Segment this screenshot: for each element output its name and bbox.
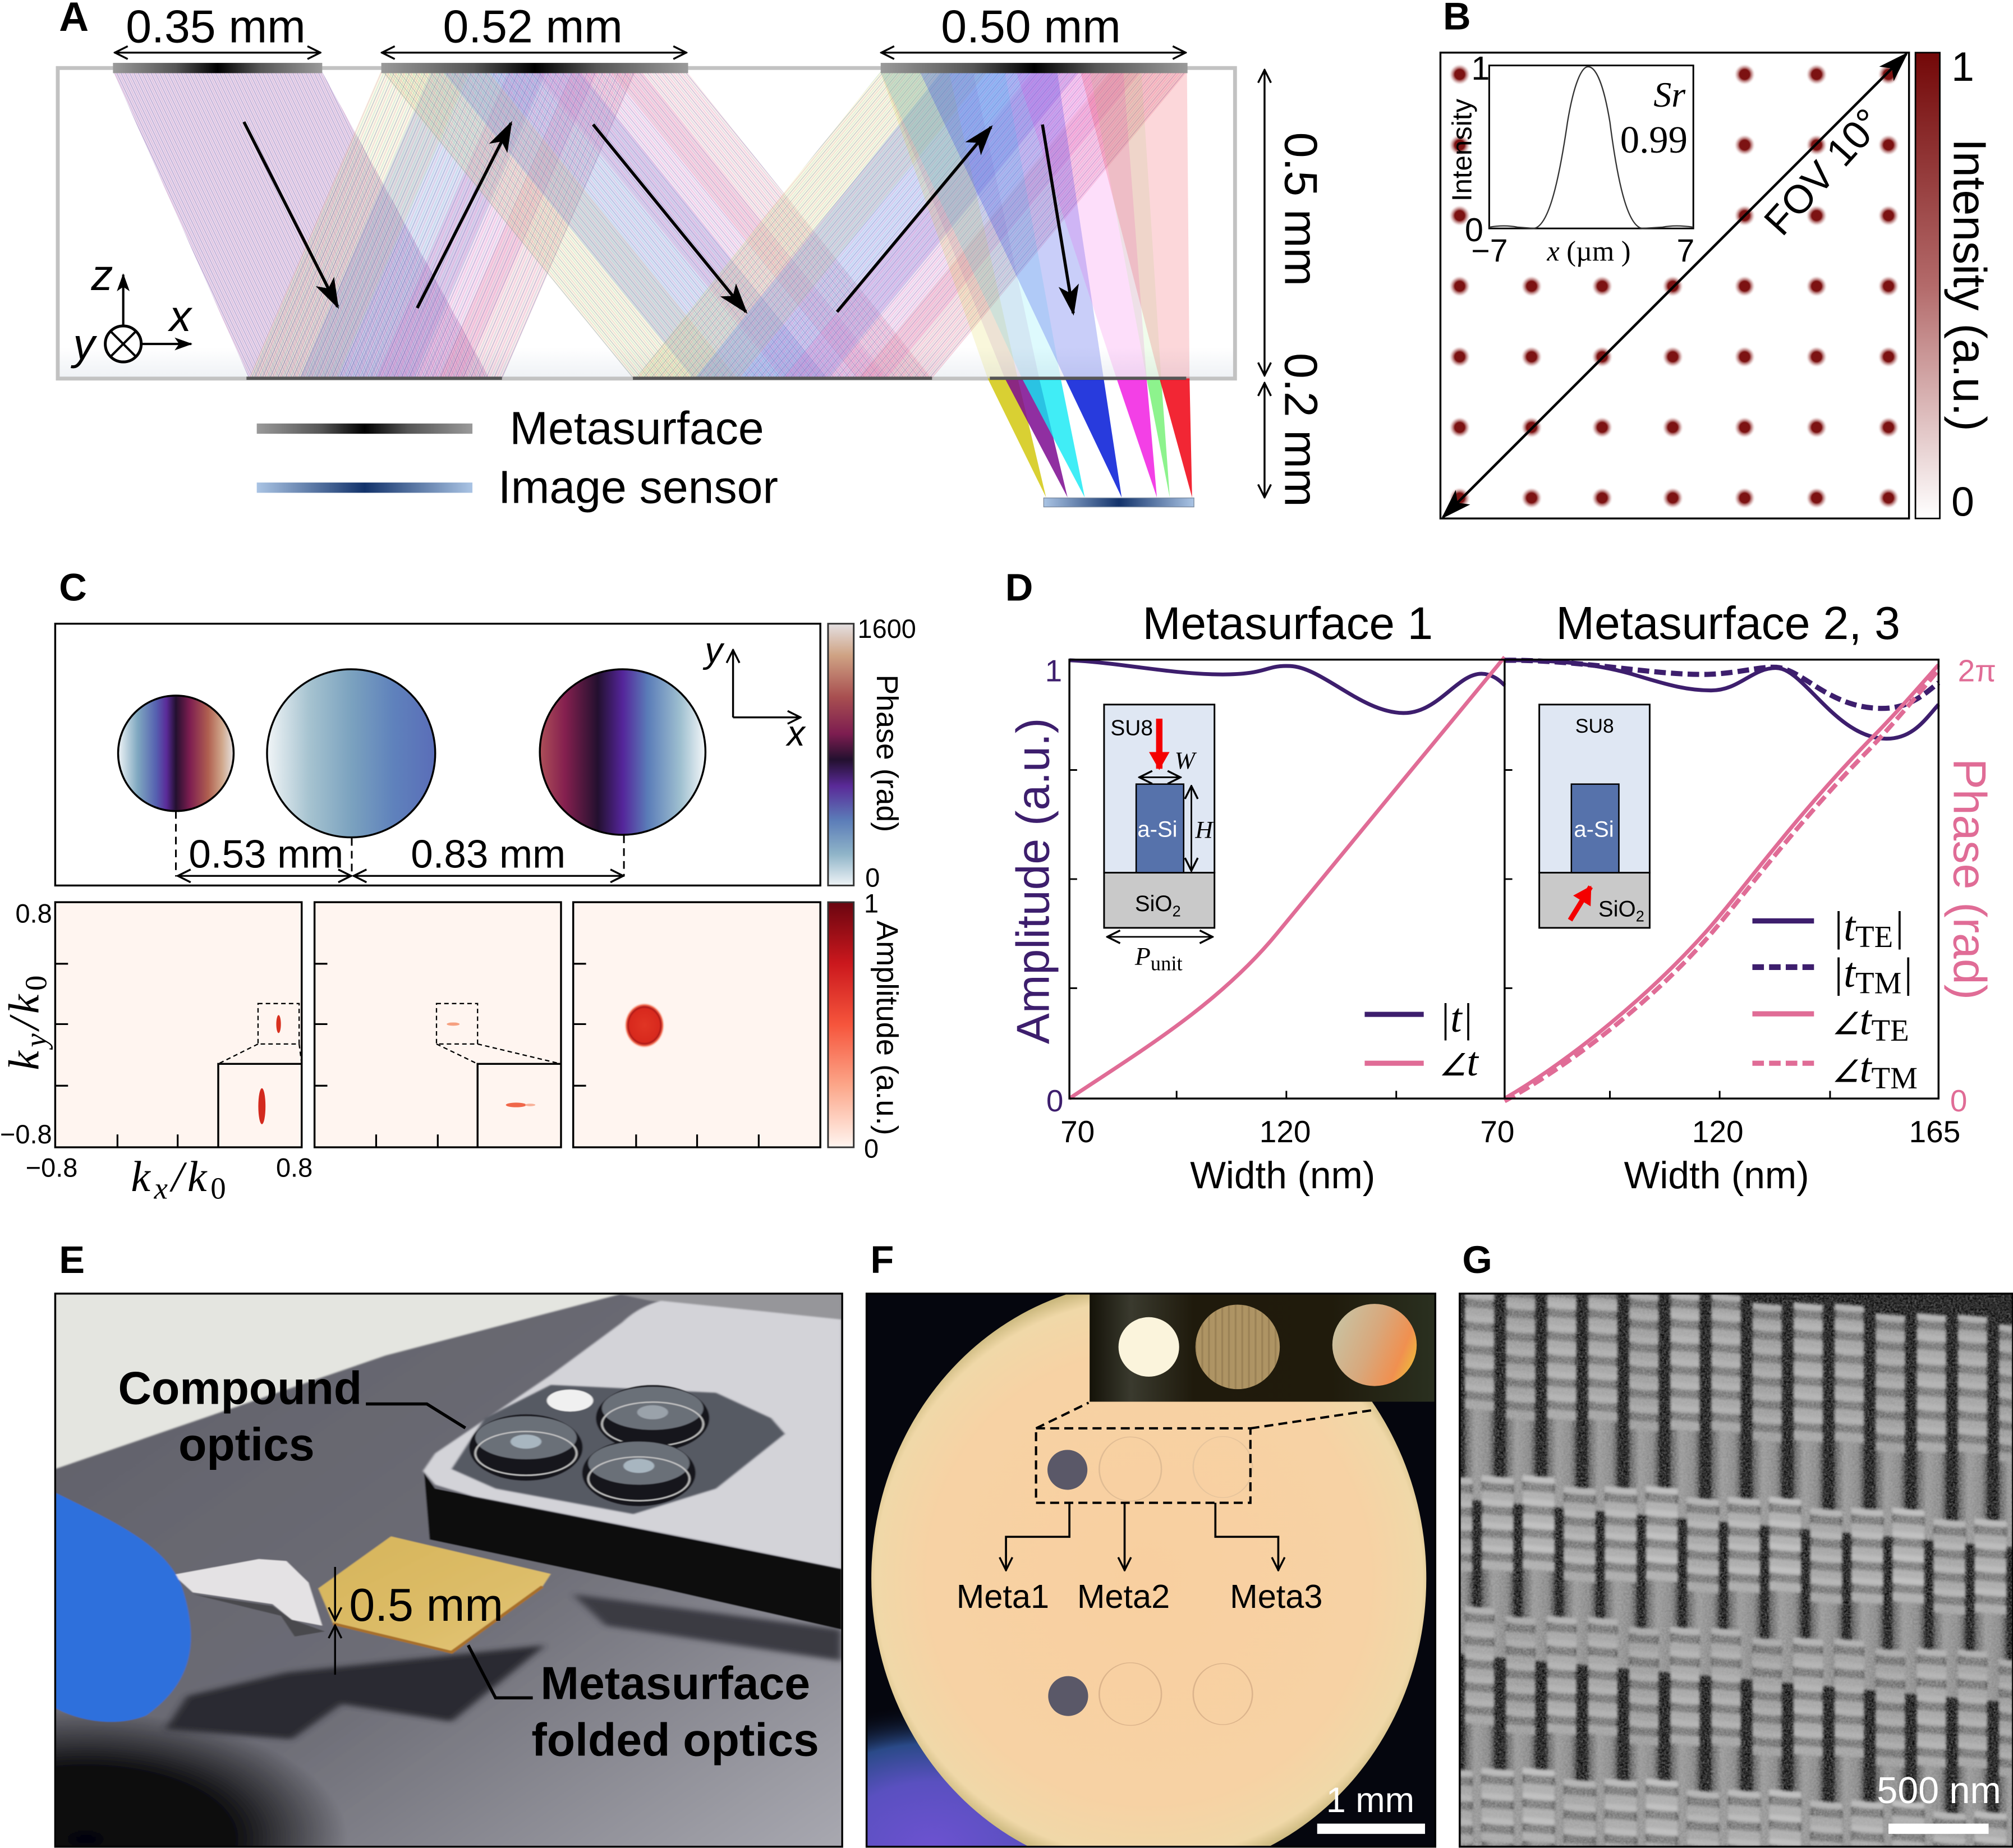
- photo frame: [55, 1294, 842, 1847]
- thickness dimension: 0.5 mm: [349, 1579, 503, 1631]
- inset: unit cell metasurface 2, 3: a-Si: [1574, 817, 1614, 842]
- callout: compound optics: [118, 1363, 465, 1470]
- scale bar: 1 mm: [1317, 1781, 1425, 1834]
- width dimension labels: 0.50 mm: [941, 1, 1121, 52]
- inset: unit cell metasurface 2, 3: SiO: [1598, 897, 1636, 921]
- dashed selection box: [1036, 1403, 1371, 1503]
- PSF inset plot: 0: [1465, 211, 1483, 249]
- PSF inset plot: 1: [1471, 49, 1490, 87]
- plot: metasurface 1: [1069, 657, 1505, 1098]
- amplitude colour bar: 1: [864, 889, 879, 918]
- FOV label: FOV 10°: [1756, 100, 1891, 244]
- inset: unit cell metasurface 1: H: [1194, 817, 1214, 844]
- panel label C: C: [59, 566, 87, 609]
- width dimension labels: 0.35 mm: [126, 1, 306, 52]
- inset: unit cell metasurface 1: SU8: [1110, 716, 1153, 741]
- k-space axis labels: 0: [210, 1171, 226, 1206]
- callout: compound optics: Compound: [118, 1363, 362, 1414]
- height dimensions: 0.2 mm: [1275, 353, 1327, 507]
- amplitude colour bar: Amplitude (a.u.): [870, 921, 904, 1136]
- width dimension labels: 0.52 mm: [443, 1, 623, 52]
- FOV diagonal arrow: [1443, 54, 1906, 517]
- panel D: amplitude and phase versus width: [1005, 566, 1996, 1197]
- PSF inset plot: 0.99: [1620, 118, 1688, 161]
- heading: Metasurface 2, 3: Metasurface 2, 3: [1556, 597, 1900, 649]
- SEM pillars: [1460, 1271, 2013, 1847]
- y-axis labels: 1: [1045, 654, 1062, 688]
- legend: metasurface 1: |t|: [1439, 995, 1473, 1041]
- scale bar: 500 nm: 500 nm: [1877, 1770, 2001, 1812]
- separation dimensions: 0.83 mm: [411, 832, 566, 876]
- legend: metasurface 2, 3: TM: [1855, 966, 1901, 1000]
- scale bar: 500 nm: [1877, 1770, 2001, 1834]
- x-axis labels: Width (nm): [1190, 1155, 1375, 1197]
- zoomed inset: [1090, 1293, 1435, 1401]
- inset: unit cell metasurface 1: W: [1175, 747, 1197, 774]
- xy axes: y: [702, 629, 725, 670]
- photo scene: [55, 1294, 842, 1847]
- x-axis labels: 120: [1692, 1114, 1744, 1149]
- y-axis labels: [1008, 654, 1996, 1118]
- k-space axis labels: y: [19, 1033, 53, 1050]
- intensity colour bar: Intensity (a.u.): [1944, 139, 1996, 431]
- glass substrate frame: [58, 68, 1235, 379]
- k-space axis labels: −0.8: [0, 1120, 52, 1149]
- legend: Image sensor: [498, 462, 778, 513]
- height dimensions: [1265, 70, 1327, 507]
- metasurface disks: [1047, 1437, 1252, 1725]
- phase disk 2: [267, 669, 435, 838]
- intensity colour bar: 1: [1951, 44, 1974, 90]
- intensity colour bar: 0: [1951, 479, 1974, 525]
- k-space axis labels: k: [0, 1051, 48, 1070]
- x-axis labels: 70: [1480, 1114, 1514, 1149]
- bottom surfaces: [246, 376, 1186, 380]
- separation dimensions: [176, 811, 624, 876]
- inset: unit cell metasurface 1: P: [1135, 942, 1151, 971]
- meta arrows and labels: Meta2: [1077, 1578, 1170, 1615]
- legend: metasurface 2, 3: TE: [1872, 1013, 1909, 1047]
- k-space plot 2: [315, 902, 561, 1147]
- k-space axis labels: /k: [169, 1152, 208, 1201]
- plot: metasurface 2, 3: [1505, 660, 1938, 1101]
- inset: unit cell metasurface 2, 3: [1539, 705, 1649, 928]
- plot axes: [1069, 660, 1938, 1098]
- k-space axis labels: 0.8: [15, 899, 52, 928]
- k-space axis labels: 0.8: [276, 1153, 312, 1183]
- legend: metasurface 2, 3: ∠t: [1832, 997, 1872, 1044]
- x-axis labels: Width (nm): [1624, 1155, 1809, 1197]
- photo frame: [1460, 1294, 2013, 1847]
- legend: metasurface 2, 3: [1752, 904, 1918, 1095]
- heading: Metasurface 1: Metasurface 1: [1143, 598, 1433, 649]
- callout: metasurface folded optics: folded optics: [531, 1714, 819, 1766]
- callout: metasurface folded optics: [468, 1645, 819, 1766]
- coordinate axes: y: [70, 321, 97, 369]
- k-space plot 3: [573, 902, 820, 1147]
- focal spots: [1449, 63, 1899, 509]
- phase colour bar: 1600: [858, 614, 916, 643]
- panel E: device photo: [55, 1238, 842, 1847]
- x-axis labels: 120: [1260, 1114, 1311, 1149]
- PSF inset plot: −7: [1471, 233, 1508, 269]
- ray direction arrows: [244, 122, 1073, 313]
- inset: unit cell metasurface 2, 3: SU8: [1575, 715, 1614, 737]
- phase disk 1: [118, 696, 233, 811]
- legend: [257, 402, 778, 513]
- x-axis labels: 165: [1909, 1114, 1960, 1149]
- legend: metasurface 2, 3: TM: [1872, 1061, 1918, 1095]
- amplitude colour bar: 0: [864, 1134, 879, 1163]
- panel label E: E: [59, 1238, 85, 1281]
- legend: metasurface 2, 3: TE: [1855, 920, 1893, 954]
- k-space axis labels: −0.8: [26, 1153, 77, 1183]
- x-axis labels: 70: [1060, 1114, 1095, 1149]
- inset: unit cell metasurface 1: [1104, 705, 1215, 974]
- inset: unit cell metasurface 1: a-Si: [1137, 817, 1178, 842]
- metasurface 2: [382, 63, 688, 73]
- xy axes: [702, 629, 806, 753]
- y-axis labels: 0: [1950, 1083, 1967, 1118]
- legend: metasurface 2, 3: |: [1901, 950, 1913, 996]
- width dimension labels: [114, 1, 1186, 53]
- PSF inset plot: x (µm ): [1546, 235, 1631, 266]
- metasurface 1: [113, 63, 322, 73]
- callout: metasurface folded optics: Metasurface: [540, 1658, 810, 1709]
- y-axis labels: 0: [1046, 1083, 1063, 1118]
- legend: metasurface 1: [1364, 995, 1479, 1084]
- meta arrows and labels: [957, 1503, 1322, 1615]
- phase colour bar: 0: [865, 863, 880, 893]
- inset: unit cell metasurface 1: 2: [1173, 902, 1181, 920]
- y-axis labels: 2π: [1958, 654, 1996, 688]
- k-space axis labels: [0, 899, 312, 1206]
- inset: unit cell metasurface 2, 3: 2: [1636, 907, 1644, 925]
- xy axes: x: [785, 713, 806, 753]
- inset: unit cell metasurface 1: SiO: [1135, 891, 1173, 916]
- intensity colour bar: [1915, 44, 1996, 525]
- phase profile frame: [55, 624, 820, 885]
- panel C: phase profiles and k-space: [0, 566, 916, 1206]
- panel label G: G: [1462, 1238, 1492, 1281]
- microscope photo: [866, 1281, 1435, 1847]
- focal spot plot frame: [1440, 53, 1909, 518]
- coordinate axes: x: [167, 292, 193, 341]
- phase colour bar: Phase (rad): [870, 674, 904, 832]
- coordinate axes: z: [90, 251, 113, 300]
- ray bundles: [113, 72, 1192, 498]
- panel label D: D: [1005, 566, 1033, 609]
- legend: metasurface 2, 3: |t: [1832, 950, 1855, 996]
- metasurface 3: [881, 63, 1188, 73]
- coordinate axes: [70, 251, 193, 369]
- phase disk 3: [540, 669, 705, 835]
- panel F: microscope image of metasurfaces: [866, 1238, 1435, 1847]
- panel B: focal spot array: [1440, 0, 1996, 525]
- PSF inset plot: [1446, 49, 1694, 269]
- legend: Metasurface: [509, 402, 764, 454]
- k-space axis labels: 0: [19, 975, 53, 991]
- PSF inset plot: Intensity: [1446, 99, 1477, 201]
- k-space axis labels: x: [154, 1171, 168, 1206]
- meta arrows and labels: Meta1: [957, 1578, 1049, 1615]
- k-space plot 1: [55, 902, 302, 1147]
- y-axis labels: Amplitude (a.u.): [1008, 718, 1059, 1044]
- legend: metasurface 1: ∠t: [1439, 1039, 1479, 1084]
- height dimensions: 0.5 mm: [1275, 132, 1327, 286]
- inset: unit cell metasurface 1: unit: [1151, 951, 1183, 974]
- image sensor: [1044, 498, 1194, 507]
- phase colour bar: [828, 614, 916, 893]
- k-space axis labels: k: [131, 1152, 150, 1201]
- legend: metasurface 2, 3: |t: [1832, 904, 1855, 950]
- PSF inset plot: 7: [1676, 233, 1694, 269]
- scale bar: 1 mm: 1 mm: [1326, 1781, 1414, 1820]
- panel A: folded optics ray diagram: [58, 0, 1327, 513]
- k-space axis labels: /k: [0, 994, 48, 1032]
- PSF inset plot: Sr: [1653, 75, 1686, 114]
- legend: metasurface 2, 3: ∠t: [1832, 1045, 1872, 1091]
- x-axis labels: [1060, 1114, 1960, 1197]
- photo frame: [867, 1294, 1435, 1847]
- y-axis labels: Phase (rad): [1944, 758, 1996, 1000]
- callout: compound optics: optics: [178, 1419, 315, 1470]
- panel G: SEM image of nanopillars: [1460, 1238, 2013, 1847]
- separation dimensions: 0.53 mm: [189, 832, 343, 876]
- meta arrows and labels: Meta3: [1230, 1578, 1322, 1615]
- panel label F: F: [870, 1238, 894, 1281]
- amplitude colour bar: [828, 889, 904, 1163]
- legend: metasurface 2, 3: |: [1893, 904, 1905, 950]
